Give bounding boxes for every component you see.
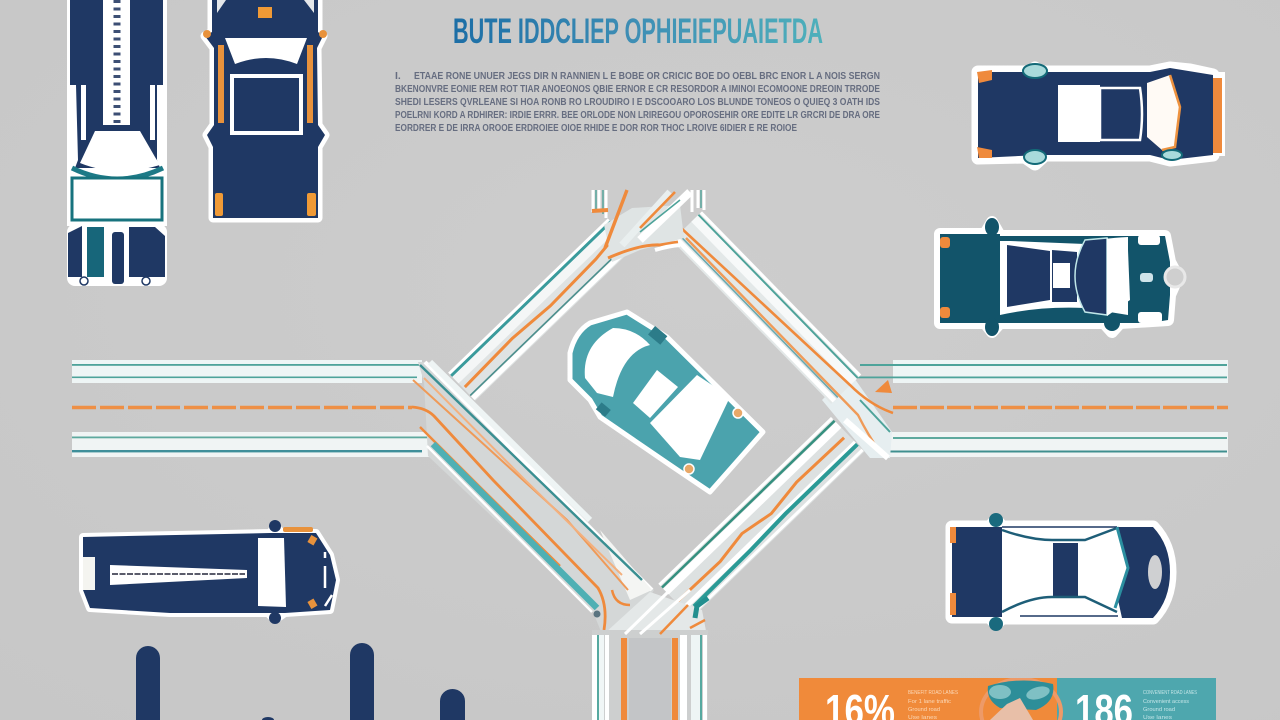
orange corners	[940, 237, 950, 318]
dark glass	[1100, 88, 1142, 140]
intro text block: SHEDI LESERS QVRLEANE SI HOA RONB RO LROUDIRO I E DSCOOARO LOS BLUNDE TONEOS O QUIEQ 3 OATH IDS	[395, 96, 880, 108]
road network	[72, 190, 1228, 720]
side window	[1058, 85, 1100, 142]
orange corners	[950, 527, 956, 615]
bar chart	[136, 643, 465, 720]
top glass	[217, 0, 226, 13]
road: upper left diagonal	[448, 218, 635, 401]
grey oval	[1148, 555, 1162, 589]
marker	[1140, 273, 1153, 282]
stat text left	[908, 690, 958, 720]
stat text right: Convenient access	[1143, 699, 1189, 705]
teal half	[1057, 678, 1216, 720]
wheels	[985, 218, 1120, 336]
intro text block: I.	[395, 70, 401, 82]
vehicle: long truck top left	[67, 0, 167, 286]
side window	[633, 370, 678, 418]
windscreen arc	[1075, 238, 1107, 315]
teal bumper arc	[72, 168, 163, 179]
windscreen	[225, 38, 307, 64]
road: right horizontal	[850, 360, 1228, 457]
road: left horizontal	[72, 360, 432, 457]
road: top stubs and junction	[592, 190, 704, 262]
side lines	[1002, 528, 1117, 612]
windscreen	[1147, 75, 1180, 150]
white window	[1107, 238, 1130, 316]
mirrors	[269, 520, 281, 624]
bar 4	[440, 689, 465, 720]
roof panel	[650, 375, 730, 460]
wheels	[1023, 64, 1182, 164]
rear wheels	[67, 224, 167, 286]
road: bottom vertical	[592, 590, 708, 720]
tail lights	[215, 193, 316, 216]
vehicle: car middle right	[940, 218, 1185, 336]
windscreen	[258, 538, 286, 607]
front hood	[1117, 527, 1170, 618]
intro text block: POELRNI KORD A RDHIRER: IRDIE ERRR. BEE ORLODE NON LRIREGOU OPOROSEHIR ORE EDITE LR GRCRI DE DRA ORE	[395, 109, 880, 121]
central teal car	[570, 312, 763, 492]
rear block	[952, 527, 1002, 617]
orange half	[799, 678, 1059, 720]
side strips	[81, 85, 155, 140]
stat text right: CONVENIENT ROAD LANES	[1143, 690, 1197, 696]
stat text left: For 1 lane traffic	[908, 699, 951, 705]
orange bumper	[1213, 78, 1222, 153]
stats panel	[799, 678, 1216, 720]
vehicle: bus bottom left	[83, 520, 336, 624]
stat text left: BENEFIT ROAD LANES	[908, 690, 958, 696]
lights	[684, 408, 743, 474]
orange roof light	[283, 527, 313, 532]
bar 3	[350, 643, 374, 720]
orange side strips	[218, 45, 313, 123]
grey disc	[1165, 267, 1185, 287]
windscreen	[585, 328, 650, 397]
title: BUTE IDDCLIEP OPHIEIEPUAIETDA	[453, 12, 823, 51]
mirrors	[596, 326, 667, 417]
wheels	[989, 513, 1003, 631]
road: lower left diagonal	[412, 362, 654, 634]
bar 1	[136, 646, 160, 720]
orange corners	[977, 70, 992, 158]
vehicle: car top right	[977, 64, 1222, 164]
intro text block: EORDRER E DE IRRA OROOE ERDROIEE OIOE RHIDE E DOR ROR THOC LROIVE 6IDIER E RE ROIOE	[395, 122, 797, 134]
headlights	[1138, 235, 1162, 323]
rear white panel	[83, 557, 95, 590]
stat text right	[1143, 690, 1197, 720]
stat text left: Ground road	[908, 707, 940, 713]
roof strip	[110, 565, 247, 585]
orange mirrors	[203, 30, 327, 38]
bar 2	[262, 717, 274, 720]
road: right junction marker	[875, 380, 892, 393]
teal hood band	[1115, 527, 1128, 608]
cabin	[232, 76, 301, 133]
stat text right: Ground road	[1143, 707, 1175, 713]
middle roof	[1053, 543, 1078, 597]
rear glass	[1007, 245, 1050, 307]
road: lower right diagonal	[658, 417, 864, 618]
cargo box	[72, 178, 162, 220]
vehicle: car bottom right	[950, 513, 1170, 631]
front lights	[307, 535, 317, 609]
vehicle: car top centre-left	[203, 0, 327, 218]
cab hood	[80, 131, 160, 171]
centre icon	[981, 679, 1061, 720]
orange roof light	[258, 7, 272, 18]
intro text block	[395, 70, 880, 134]
cabin frame	[1000, 237, 1128, 315]
road: upper right diagonal	[672, 211, 893, 458]
centre strip	[103, 0, 130, 125]
centre panel	[1053, 263, 1070, 288]
intro text block: ETAAE RONE UNUER JEGS DIR N RANNIEN L E BOBE OR CRICIC BOE DO OEBL BRC ENOR L A NOIS SERGN	[414, 70, 880, 82]
intro text block: BKENONVRE EONIE REM ROT TIAR ANOEONOS QBIE ERNOR E CR RESORDOR A IMINOI ECOMOONE DREOIN TRRODE	[395, 83, 880, 95]
grille marks	[325, 552, 332, 606]
